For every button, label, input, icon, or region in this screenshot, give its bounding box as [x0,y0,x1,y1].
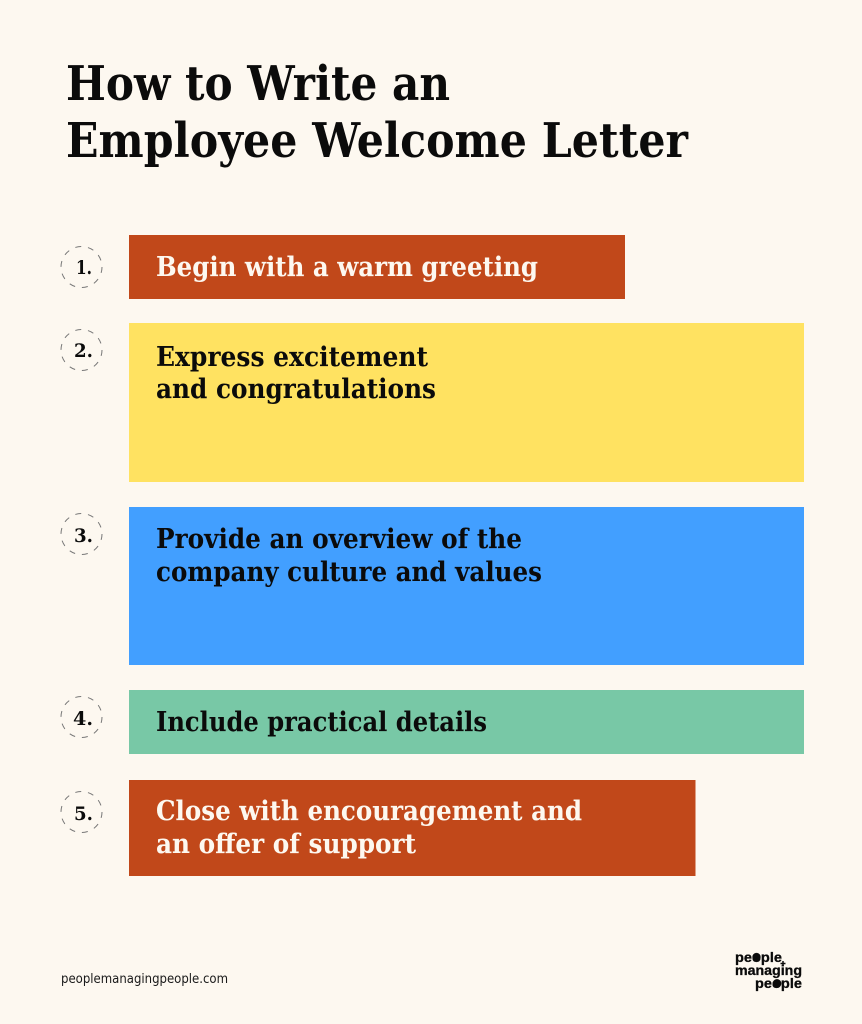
logo: managing [735,962,802,978]
number badge 1 [61,246,102,288]
panel: begin with a warm greeting [129,235,625,299]
number badge 4 [61,696,102,738]
step 5 [61,780,696,876]
number badge 3: 3. [74,525,93,547]
footer website: peoplemanagingpeople.com [61,972,228,987]
panel: close with encouragement: Close with encouragement and [156,796,582,827]
panel: practical details: Include practical details [156,707,487,738]
step 2 [61,323,804,482]
title: Employee Welcome Letter [66,113,689,169]
panel: express excitement: Express excitement [156,342,428,373]
panel: practical details [129,690,804,754]
panel: begin with a warm greeting: Begin with a warm greeting [156,252,538,283]
logo [735,949,802,991]
panel: company culture [129,507,804,665]
number badge 2 [61,330,102,370]
panel: express excitement [129,323,804,482]
panel: express excitement: and congratulations [156,374,436,405]
logo: people [735,949,782,965]
panel: close with encouragement [129,780,696,876]
number badge 2: 2. [74,340,93,362]
panel: company culture: Provide an overview of the [156,524,522,555]
panel: company culture: company culture and values [156,557,542,588]
number badge 4: 4. [73,708,93,730]
number badge 1: 1. [76,257,92,279]
number badge 3 [61,514,102,554]
title: How to Write an [66,56,450,112]
logo: people [755,975,802,991]
title [66,56,689,169]
step 1 [61,235,625,299]
step 3 [61,507,804,665]
panel: close with encouragement: an offer of support [156,829,416,860]
number badge 5 [61,792,102,832]
number badge 5: 5. [74,803,93,825]
step 4 [61,690,804,754]
